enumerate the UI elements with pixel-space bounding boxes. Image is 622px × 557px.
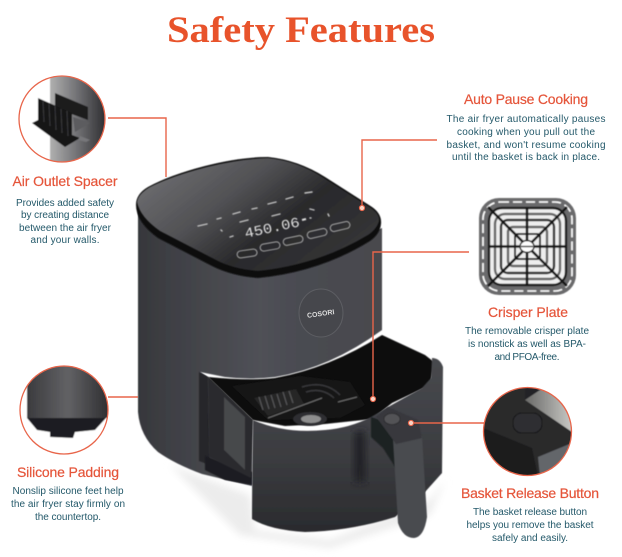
heading: Air Outlet Spacer <box>12 173 118 189</box>
description: The removable crisper plate <box>465 326 589 337</box>
icon: release button close-up <box>483 387 572 476</box>
connector: air outlet spacer <box>108 118 166 177</box>
handle neck <box>371 417 397 470</box>
connector: auto pause cooking <box>359 140 437 211</box>
handle top <box>376 407 422 444</box>
description: The air fryer automatically pauses <box>446 114 606 125</box>
description: basket, and won't resume cooking <box>446 140 606 151</box>
panel: crisper plate <box>465 198 589 363</box>
drawer front <box>252 358 443 532</box>
description <box>446 114 606 163</box>
description: Nonslip silicone feet help <box>12 486 124 497</box>
heading: Basket Release Button <box>461 485 599 501</box>
fryer lid rim <box>136 157 381 278</box>
panel: air outlet spacer <box>12 76 118 246</box>
floor shadow <box>170 465 445 548</box>
drawer interior <box>208 335 434 426</box>
description: is nonstick as well as BPA- <box>468 339 586 350</box>
description <box>466 507 594 544</box>
description: cooking when you pull out the <box>457 127 595 138</box>
heading: Silicone Padding <box>17 464 119 480</box>
description: and your walls. <box>30 235 100 246</box>
title: Safety Features <box>167 10 435 51</box>
description: the air fryer stay firmly on <box>11 499 125 510</box>
panel: silicone padding <box>11 366 125 523</box>
description: until the basket is back in place. <box>452 152 600 163</box>
connector: crisper plate <box>370 252 469 402</box>
description: The basket release button <box>473 507 587 518</box>
heading: Crisper Plate <box>488 304 568 320</box>
fryer body <box>138 205 382 486</box>
brand badge <box>299 289 343 337</box>
description: safely and easily. <box>492 533 568 544</box>
drawer base shadow <box>205 456 252 485</box>
description: Provides added safety <box>16 198 114 209</box>
air fryer product illustration <box>136 157 445 548</box>
body slot <box>199 372 210 465</box>
description <box>16 198 114 246</box>
icon: spacer close-up <box>19 76 105 162</box>
panel: auto pause cooking <box>446 91 606 163</box>
description: the countertop. <box>35 512 101 523</box>
brand badge: COSORI <box>307 309 335 320</box>
description <box>11 486 125 523</box>
control panel display <box>198 192 351 258</box>
lid glass top <box>137 158 379 271</box>
handle grip <box>393 436 427 538</box>
panel: basket release button <box>461 387 599 544</box>
drawer side panel <box>208 377 253 478</box>
release button <box>384 414 400 424</box>
handle shadow <box>354 430 366 482</box>
icon: crisper plate <box>479 198 576 295</box>
description <box>465 326 589 363</box>
connector: basket release button <box>408 420 484 426</box>
description: and PFOA-free. <box>494 352 560 363</box>
description: helps you remove the basket <box>466 520 594 531</box>
connector: silicone padding <box>108 396 138 398</box>
heading: Auto Pause Cooking <box>464 91 588 107</box>
temperature and time readout: 450.06 <box>243 215 301 243</box>
icon: silicone foot close-up <box>20 366 109 454</box>
description: by creating distance <box>21 210 109 221</box>
basket rack <box>232 376 365 426</box>
description: between the air fryer <box>19 223 112 234</box>
